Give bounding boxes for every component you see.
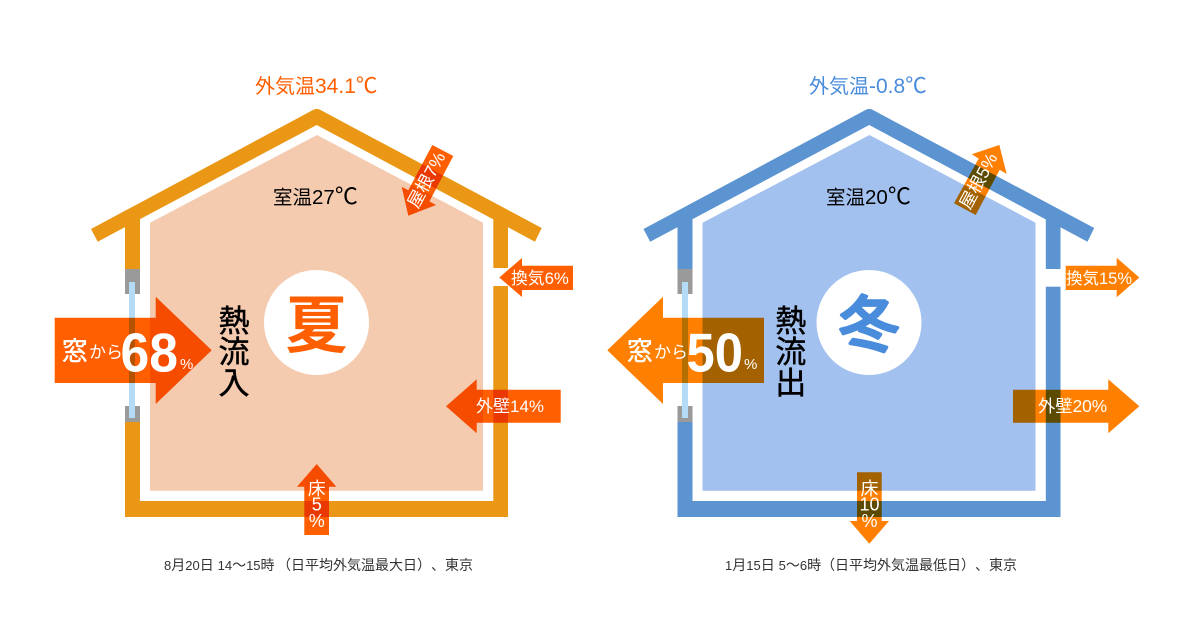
arrow: floor 5% (297, 464, 336, 535)
label: window 50%: % (744, 356, 757, 373)
house frame: winter (644, 109, 1094, 517)
vertical label: heat inflow: 入 (218, 366, 250, 401)
label: floor 5% (308, 479, 326, 531)
panel: winter house (607, 69, 1139, 575)
caption: summer: 8月20日 14〜15時 (164, 555, 275, 575)
vertical label: heat inflow: 熱 (218, 304, 250, 339)
arrow: wall 14% (446, 379, 561, 433)
caption: winter: （日平均外気温最低日）、東京 (821, 555, 1017, 575)
label: floor 5%: 床 (308, 479, 326, 499)
label: window 68%: 68 (120, 322, 178, 384)
vertical label: heat outflow: 流 (775, 335, 806, 370)
caption: summer: （日平均外気温最大日）、東京 (277, 555, 473, 575)
label: room temperature summer: 室温27℃ (273, 177, 358, 211)
vertical label: heat outflow: 出 (775, 366, 806, 401)
arrow: floor 10% (850, 472, 889, 544)
arrow: window heat loss 50% (607, 297, 764, 404)
arrow: roof 5% (954, 145, 1007, 215)
caption: winter: 1月15日 5〜6時 (725, 555, 821, 575)
vertical label: heat inflow: 流 (218, 335, 250, 370)
window: summer (125, 269, 140, 422)
label: ventilation 15%: 換気15% (1066, 269, 1132, 288)
label: floor 10% (859, 479, 880, 531)
label: window 68% (62, 322, 193, 384)
season badge: winter (816, 270, 922, 375)
panel: summer house (55, 69, 573, 575)
label: floor 10%: 床 (860, 479, 878, 499)
label: window 50%: から (654, 343, 688, 362)
label: wall 20%: 外壁20% (1038, 396, 1107, 416)
season badge: winter: 冬 (839, 292, 899, 359)
arrow: roof 7% (402, 145, 453, 216)
label: roof 5%: 屋根5% (956, 150, 1001, 212)
arrow: wall 20% (1013, 379, 1139, 433)
arrow: ventilation 15% (1066, 258, 1139, 297)
arrow: window heat gain 68% (55, 297, 212, 404)
label: window 68%: 窓 (62, 338, 88, 366)
label: room temperature winter: 室温20℃ (826, 177, 911, 211)
season badge: summer: 夏 (285, 292, 348, 361)
heading: outside temperature summer: 外気温34.1℃ (255, 69, 377, 100)
label: window 50% (627, 322, 757, 384)
label: roof 7%: 屋根7% (404, 149, 449, 211)
label: wall 14%: 外壁14% (476, 397, 544, 416)
arrow: ventilation 6% (499, 258, 573, 297)
house interior: summer (150, 135, 483, 491)
label: window 68%: % (180, 356, 193, 373)
vertical label: heat outflow: 熱 (775, 304, 806, 339)
label: window 50%: 窓 (627, 338, 653, 366)
label: floor 10%: 10 (859, 495, 880, 515)
label: window 50%: 50 (686, 322, 743, 384)
label: floor 5%: % (309, 511, 325, 531)
vertical label: heat outflow (775, 304, 806, 401)
window: winter (678, 269, 692, 422)
house interior: winter (702, 135, 1036, 491)
label: floor 5%: 5 (312, 495, 322, 515)
heading: outside temperature winter: 外気温-0.8℃ (809, 69, 927, 100)
vertical label: heat inflow (218, 304, 250, 401)
house frame: summer (91, 109, 542, 517)
label: floor 10%: % (861, 511, 878, 531)
label: ventilation 6%: 換気6% (511, 269, 569, 288)
season badge: summer (264, 270, 369, 375)
label: window 68%: から (89, 343, 123, 362)
